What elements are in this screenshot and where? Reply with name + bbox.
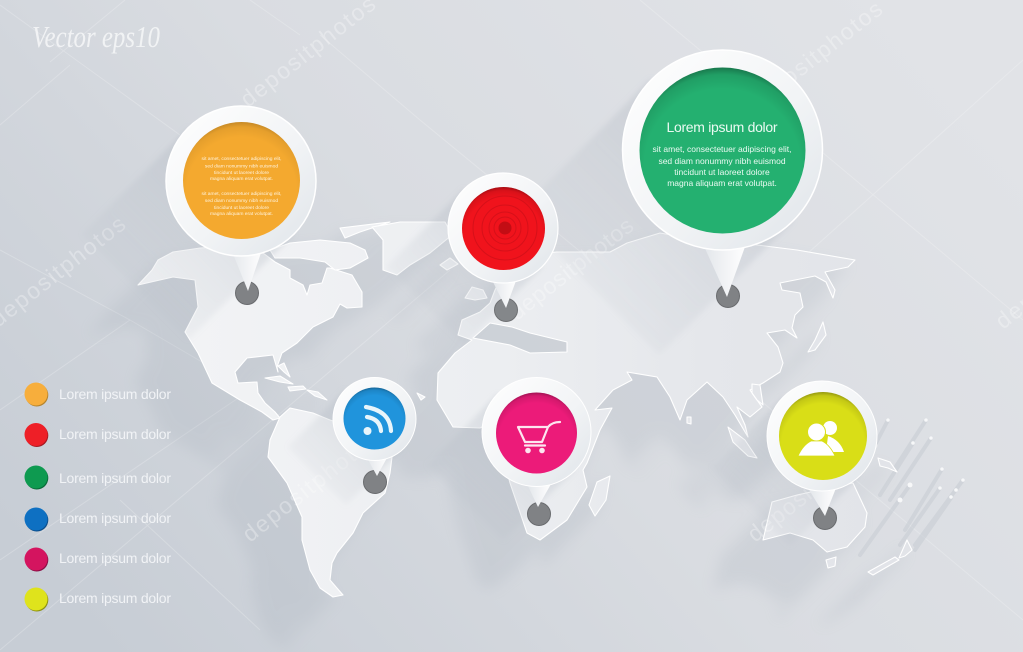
watermarks: depositphotos	[504, 212, 638, 325]
icon: people	[798, 421, 844, 456]
island shadow streaks	[860, 420, 963, 555]
legend item green	[24, 466, 171, 490]
legend item blue	[24, 508, 171, 532]
legend item orange	[24, 382, 171, 406]
world map continents	[138, 222, 912, 597]
legend	[24, 382, 171, 612]
watermarks: depositphotos	[237, 425, 382, 547]
pin: yellow	[767, 381, 877, 530]
pin: orange	[166, 106, 316, 304]
legend item red: Lorem ipsum dolor	[59, 426, 171, 442]
icon: shopping cart	[518, 422, 560, 453]
green panel text	[653, 144, 791, 188]
legend item yellow: Lorem ipsum dolor	[59, 590, 171, 606]
map long shadow	[88, 228, 906, 647]
legend item blue: Lorem ipsum dolor	[59, 510, 171, 526]
pin: red	[448, 173, 558, 322]
green panel text: magna aliquam erat volutpat.	[667, 178, 777, 188]
green panel text: tincidunt ut laoreet dolore	[674, 167, 770, 177]
orange panel text: sit amet, consectetuer adipiscing elit,	[202, 156, 281, 162]
pin: pink	[482, 378, 591, 526]
legend item red	[24, 423, 171, 447]
orange panel text: sed diam nonummy nibh euismod	[205, 198, 278, 204]
pin: blue	[333, 378, 416, 494]
pin: green	[622, 50, 822, 308]
title: Vector eps10: Vector eps10	[32, 19, 160, 54]
icon: wifi	[364, 407, 391, 435]
legend item pink	[24, 548, 171, 572]
green panel text: sed diam nonummy nibh euismod	[658, 156, 786, 166]
orange panel text: magna aliquam erat volutpat.	[210, 211, 273, 217]
legend item yellow	[24, 588, 171, 612]
target icon	[473, 196, 537, 260]
legend item green: Lorem ipsum dolor	[59, 470, 171, 486]
island dots	[886, 418, 965, 502]
green panel heading: Lorem ipsum dolor	[666, 119, 778, 135]
orange panel text	[202, 156, 281, 217]
orange panel text: magna aliquam erat volutpat.	[210, 176, 273, 182]
legend item orange: Lorem ipsum dolor	[59, 386, 171, 402]
orange panel text: tincidunt ut laoreet dolore	[214, 205, 269, 211]
orange panel text: sit amet, consectetuer adipiscing elit,	[202, 191, 281, 197]
orange panel text: sed diam nonummy nibh euismod	[205, 164, 278, 170]
orange panel text: tincidunt ut laoreet dolore	[214, 170, 269, 176]
green panel text: sit amet, consectetuer adipiscing elit,	[653, 144, 791, 154]
pin long shadows	[82, 79, 861, 546]
watermarks: depositphotos	[742, 429, 883, 547]
legend item pink: Lorem ipsum dolor	[59, 550, 171, 566]
